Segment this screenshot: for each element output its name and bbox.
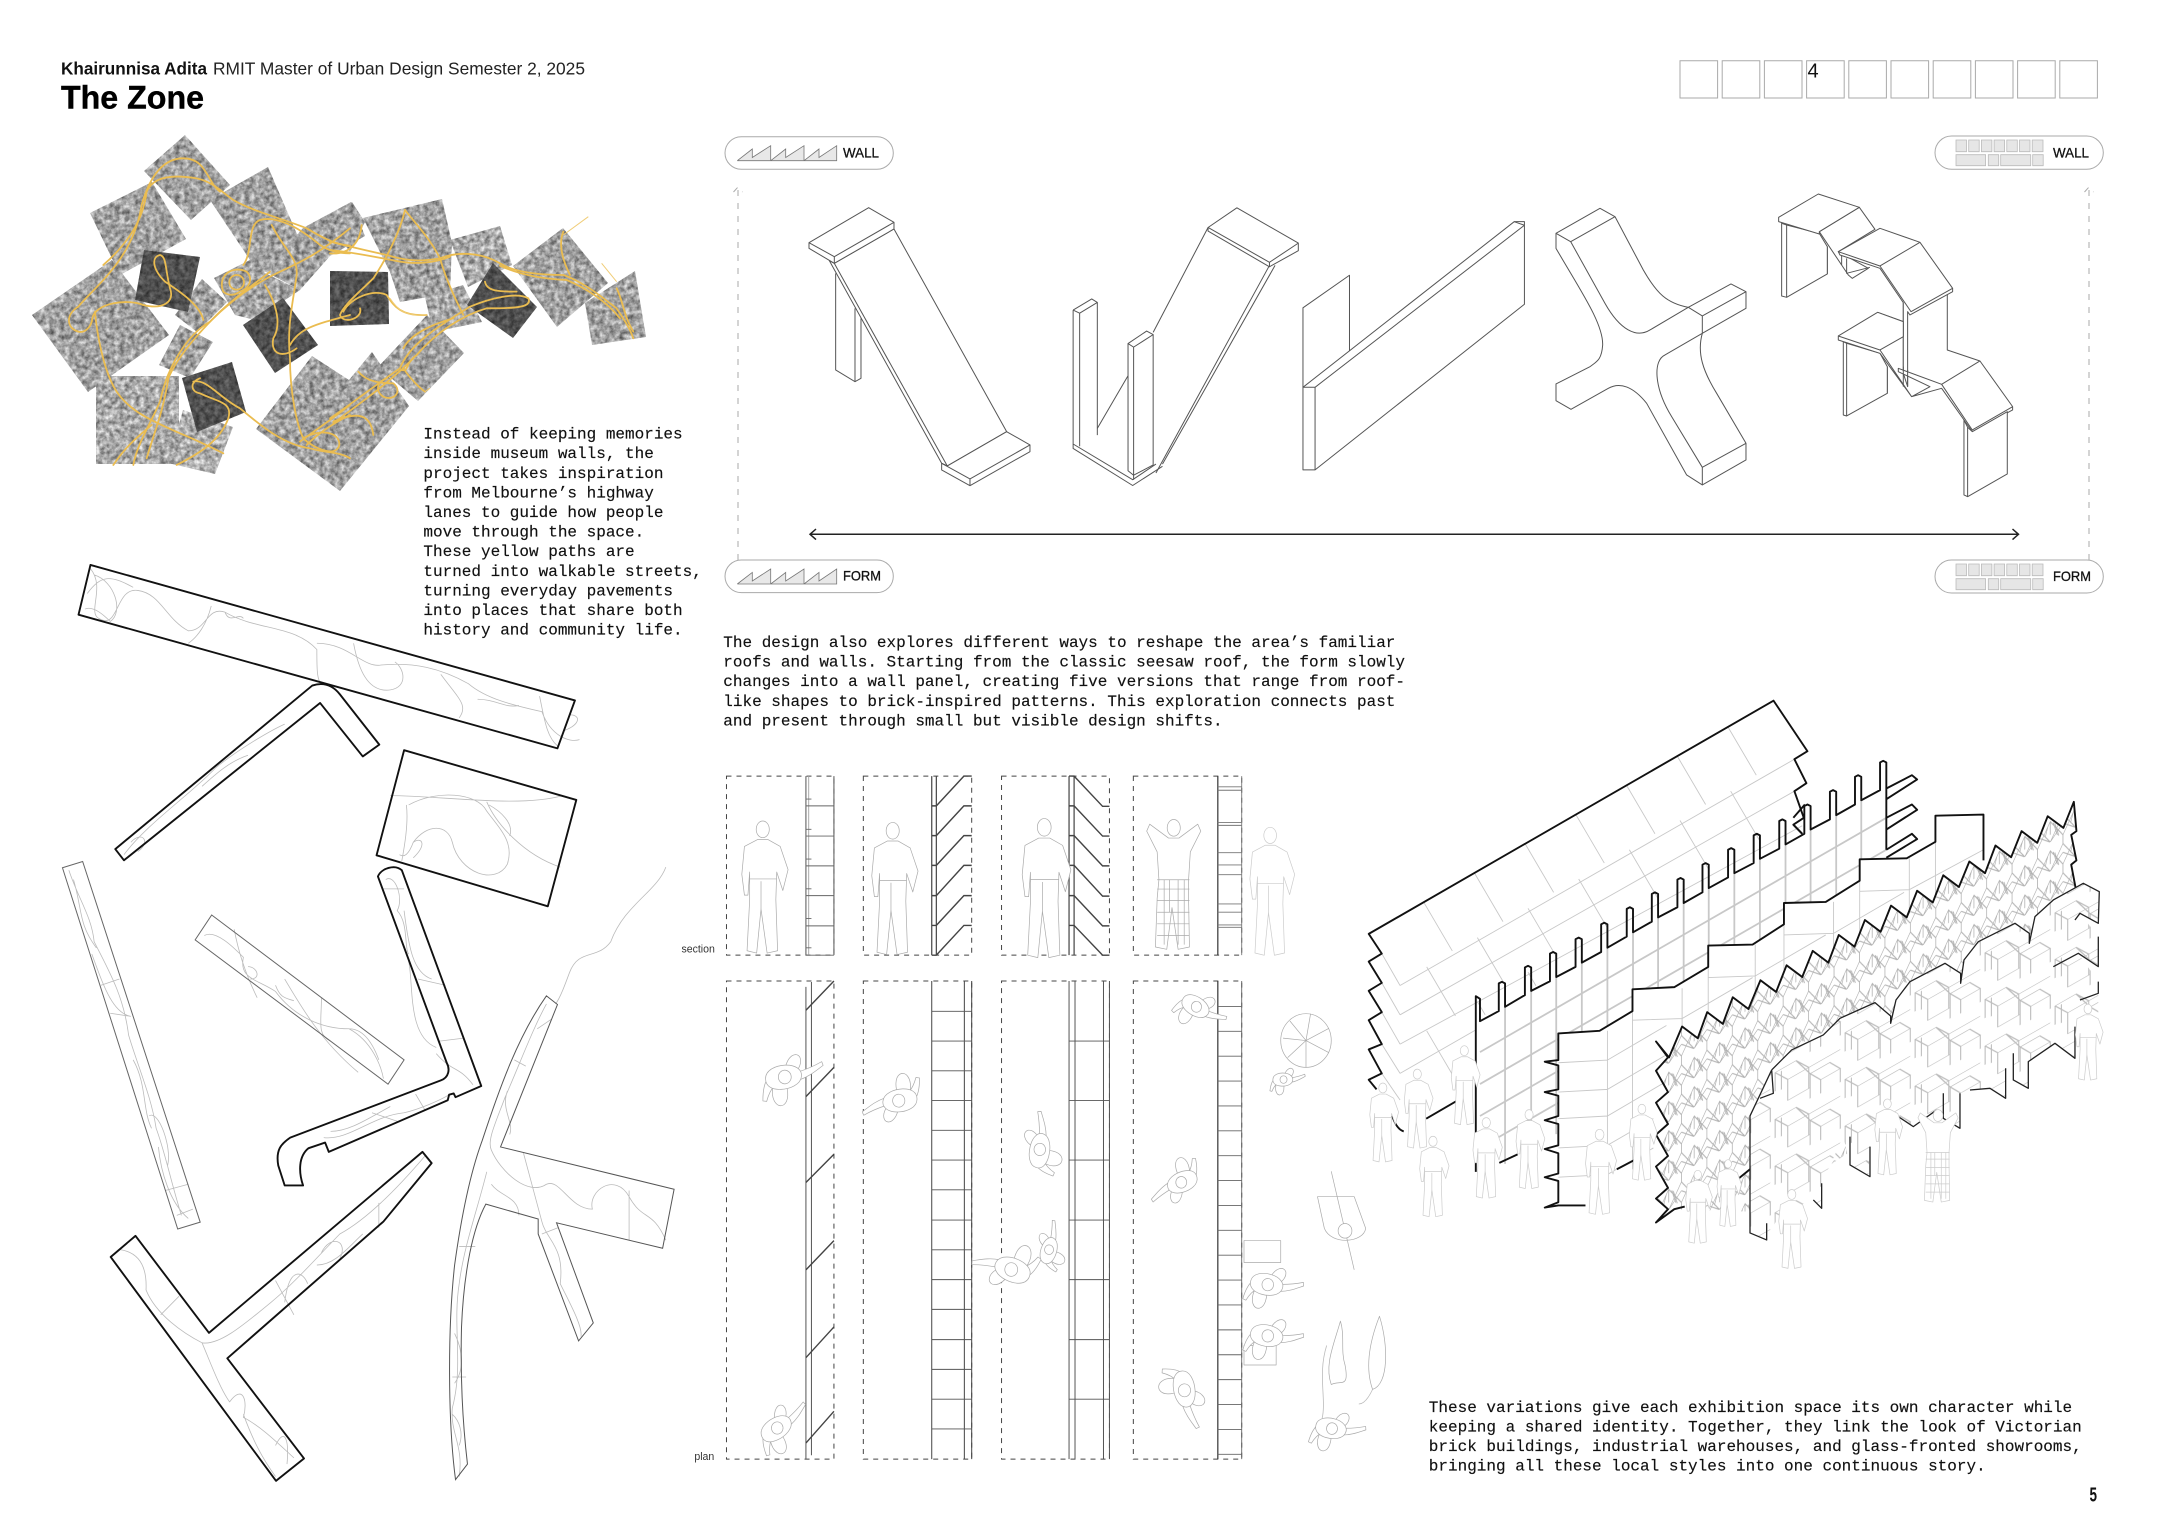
text block: exhibition variations bbox=[1429, 1399, 2082, 1476]
form 4: cross-shaped panel bbox=[1556, 208, 1746, 485]
roof layer bbox=[1369, 701, 1807, 1131]
text block: exhibition variations: These variations give each exhibition space its own character while bbox=[1429, 1399, 2072, 1417]
section study B bbox=[863, 776, 972, 955]
strip 8: curved strip with branches bbox=[450, 867, 674, 1480]
yellow highway paths: west bbox=[69, 158, 350, 465]
plan study B bbox=[858, 981, 972, 1459]
plan study C bbox=[967, 981, 1109, 1459]
strip 4: thin left strip bbox=[62, 862, 200, 1229]
text block: highway lanes: turned into walkable streets, bbox=[423, 563, 702, 581]
text block: highway lanes: into places that share both bbox=[423, 602, 683, 620]
text block: highway lanes: inside museum walls, the bbox=[423, 445, 654, 463]
arrow: left dashed vertical bbox=[734, 187, 742, 560]
brick lattice wall layer bbox=[1656, 802, 2076, 1222]
yellow highway paths: east bbox=[330, 210, 633, 435]
arrow: right dashed vertical bbox=[2084, 187, 2094, 560]
text block: roof and wall exploration: and present through small but visible design shifts. bbox=[723, 712, 1223, 730]
text block: exhibition variations: keeping a shared identity. Together, they link the look of Victorian bbox=[1429, 1418, 2082, 1436]
text block: roof and wall exploration: like shapes to brick-inspired patterns. This exploration connects past bbox=[723, 693, 1395, 711]
figures: umbrella and sitter bbox=[1270, 1014, 1331, 1095]
faint yellow path ends bbox=[390, 217, 617, 392]
pill: wall (brick) bbox=[1935, 136, 2103, 169]
pill: wall (brick): WALL bbox=[2053, 145, 2089, 161]
text block: highway lanes: from Melbourne’s highway bbox=[423, 484, 654, 502]
strip 3: rectangular court bbox=[377, 750, 576, 906]
strip 2: bent strip bbox=[115, 684, 379, 860]
form diagram: right pills bbox=[1935, 136, 2103, 593]
strip 5: thin centre strip bbox=[195, 915, 404, 1084]
header: author and course line: RMIT Master of Urban Design Semester 2, 2025 bbox=[213, 59, 585, 79]
figure: standing woman bbox=[1250, 827, 1295, 955]
header: author and course line: Khairunnisa Adita bbox=[61, 59, 207, 79]
title: The Zone bbox=[61, 79, 204, 115]
text block: highway lanes: history and community life. bbox=[423, 622, 683, 640]
text block: highway lanes: project takes inspiration bbox=[423, 465, 663, 483]
form 2: folded roof with uprights bbox=[1073, 208, 1298, 486]
isometric installation drawing bbox=[1369, 701, 2076, 1222]
text block: roof and wall exploration: roofs and walls. Starting from the classic seesaw roof, the form slowly bbox=[723, 654, 1405, 672]
page number: 5 bbox=[2090, 1484, 2097, 1506]
pill: form (sawtooth): FORM bbox=[843, 568, 881, 584]
section study A bbox=[726, 776, 834, 955]
street strips plan bbox=[62, 565, 674, 1481]
form 3: flat wall panel bbox=[1303, 222, 1524, 470]
pill: wall (sawtooth) bbox=[725, 137, 893, 169]
pill: form (brick): FORM bbox=[2053, 568, 2091, 584]
text block: roof and wall exploration bbox=[723, 634, 1405, 730]
pill: form (brick) bbox=[1935, 560, 2103, 593]
text block: highway lanes: lanes to guide how people bbox=[423, 504, 663, 522]
text block: roof and wall exploration: The design also explores different ways to reshape the area’s familiar bbox=[723, 634, 1395, 652]
aerial tiles: light bbox=[32, 135, 646, 491]
label: plan: plan bbox=[694, 1451, 714, 1463]
plan study A bbox=[726, 981, 834, 1462]
arrow: horizontal double-headed bbox=[810, 529, 2018, 540]
page navigator boxes: 4 bbox=[1808, 61, 1819, 83]
page navigator boxes bbox=[1680, 61, 2097, 98]
hood module wall layer bbox=[1750, 883, 2099, 1240]
section and plan studies bbox=[681, 776, 1386, 1463]
grid wall layer bbox=[1476, 761, 1917, 1172]
text block: exhibition variations: bringing all these local styles into one continuous story. bbox=[1429, 1458, 1986, 1476]
strip 1: long diagonal bbox=[79, 565, 580, 748]
form 1: seesaw roof bbox=[809, 208, 1030, 486]
text block: roof and wall exploration: changes into a wall panel, creating five versions that range from roof- bbox=[723, 673, 1405, 691]
stepped wall layer bbox=[1545, 815, 1983, 1209]
form diagram: left pills bbox=[725, 137, 893, 593]
aerial tiles: dark parkland bbox=[135, 250, 537, 432]
text block: highway lanes: These yellow paths are bbox=[423, 543, 635, 561]
section study D bbox=[1133, 776, 1242, 955]
text block: exhibition variations: brick buildings, industrial warehouses, and glass-fronted showrooms, bbox=[1429, 1438, 2082, 1456]
text block: highway lanes bbox=[423, 426, 702, 640]
label: section: section bbox=[681, 943, 715, 956]
aerial map collage with yellow highway lines bbox=[32, 135, 646, 491]
pill: form (sawtooth) bbox=[725, 560, 893, 593]
people around the installation bbox=[1370, 1004, 2103, 1268]
strip 7: T strip bbox=[111, 1152, 432, 1481]
pill: wall (sawtooth): WALL bbox=[843, 144, 879, 160]
form 5: stepped hoods bbox=[1779, 194, 2013, 497]
section study C bbox=[1002, 776, 1109, 958]
plan study D bbox=[1133, 981, 1242, 1459]
figures: bench group and cyclist bbox=[1242, 1171, 1366, 1367]
text block: highway lanes: move through the space. bbox=[423, 524, 644, 542]
text block: highway lanes: Instead of keeping memories bbox=[423, 426, 683, 444]
figures: dog walkers bbox=[1307, 1316, 1386, 1458]
strip 6: hook strip bbox=[278, 867, 481, 1185]
text block: highway lanes: turning everyday pavements bbox=[423, 582, 673, 600]
